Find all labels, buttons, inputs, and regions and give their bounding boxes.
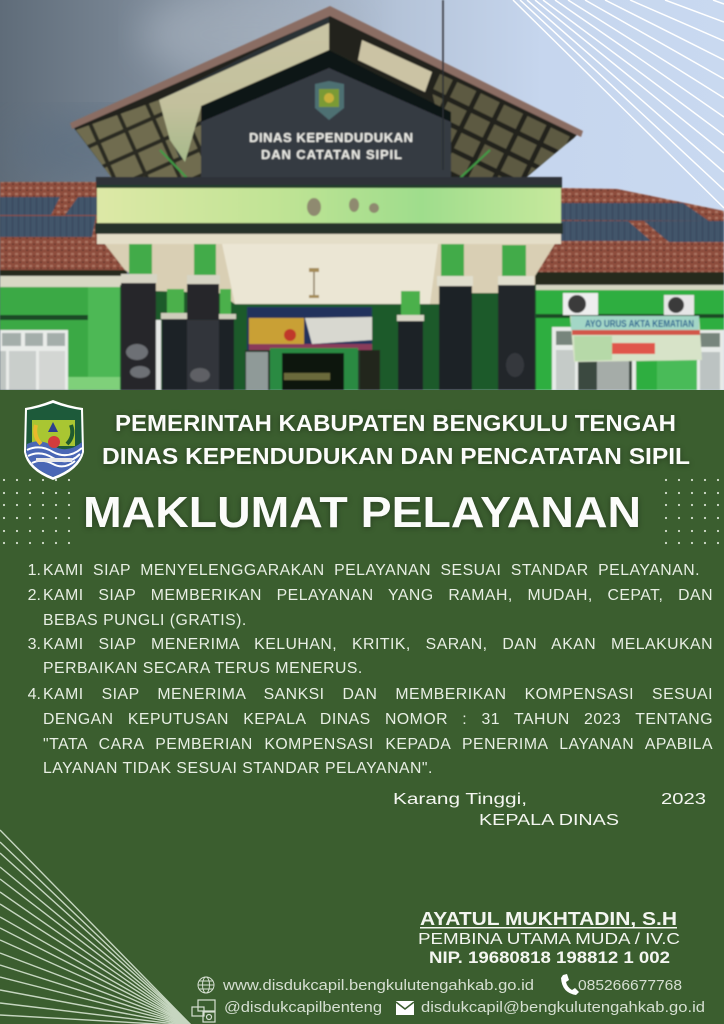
official NIP: NIP. 19680818 198812 1 002 bbox=[429, 949, 670, 967]
left wing wall bbox=[0, 270, 127, 390]
right tiled roof bbox=[528, 188, 724, 272]
title: MAKLUMAT PELAYANAN bbox=[83, 488, 641, 537]
gable sign text: DINAS KEPENDUDUKAN bbox=[249, 130, 413, 145]
text block: service pledge list: 4. bbox=[28, 686, 41, 703]
banner: ayo urus akta kematian: AYO URUS AKTA KEMATIAN bbox=[585, 319, 694, 330]
contact footer bbox=[191, 974, 705, 1023]
text block: service pledge list: LAYANAN TIDAK SESUAI STANDAR PELAYANAN". bbox=[43, 760, 433, 777]
text block: service pledge list: KAMI SIAP MENYELENGGARAKAN PELAYANAN SESUAI STANDAR PELAYANAN. bbox=[43, 562, 700, 579]
text block: service pledge list bbox=[28, 562, 713, 777]
banner: ayo urus akta kematian bbox=[570, 316, 702, 362]
text block: service pledge list: "TATA CARA PEMBERIAN KOMPENSASI KEPADA PENERIMA LAYANAN APABILA bbox=[43, 736, 713, 753]
canopy ceiling and entrance bbox=[97, 234, 561, 390]
left window bbox=[0, 330, 68, 390]
official name: AYATUL MUKHTADIN, S.H bbox=[420, 908, 677, 929]
icon: mail bbox=[396, 1001, 414, 1015]
left solar panels bbox=[0, 197, 97, 237]
dot grid right bbox=[664, 478, 720, 544]
gable sign text bbox=[249, 130, 413, 162]
text block: service pledge list: 1. bbox=[28, 562, 41, 579]
social handle: @disdukcapilbenteng bbox=[224, 1000, 382, 1016]
place and date: 2023 bbox=[661, 791, 706, 808]
dot grid left bbox=[2, 478, 70, 544]
website: www.disdukcapil.bengkulutengahkab.go.id bbox=[222, 978, 534, 994]
heading line: government name: PEMERINTAH KABUPATEN BENGKULU TENGAH bbox=[115, 410, 676, 436]
text block: service pledge list: 2. bbox=[28, 587, 41, 604]
place and date: Karang Tinggi, bbox=[393, 791, 527, 808]
heading line: agency name: DINAS KEPENDUDUKAN DAN PENCATATAN SIPIL bbox=[102, 443, 690, 469]
entrance notice board bbox=[247, 307, 372, 350]
icon: globe bbox=[198, 977, 214, 993]
right wing wall bbox=[528, 272, 724, 390]
air conditioner units bbox=[563, 293, 694, 315]
icon: phone bbox=[561, 974, 579, 995]
heading: institution names and title bbox=[83, 410, 690, 537]
gable emblem bbox=[315, 81, 344, 120]
fascia band bbox=[95, 177, 563, 244]
text block: service pledge list: KAMI SIAP MEMBERIKAN PELAYANAN YANG RAMAH, MUDAH, CEPAT, DAN bbox=[43, 587, 713, 604]
phone number: 085266677768 bbox=[578, 978, 682, 994]
text block: service pledge list: BEBAS PUNGLI (GRATIS). bbox=[43, 612, 247, 629]
position title: KEPALA DINAS bbox=[479, 812, 619, 829]
text block: signature bbox=[393, 791, 706, 967]
text block: service pledge list: KAMI SIAP MENERIMA KELUHAN, KRITIK, SARAN, DAN AKAN MELAKUKAN bbox=[43, 636, 713, 653]
text block: service pledge list: DENGAN KEPUTUSAN KEPALA DINAS NOMOR : 31 TAHUN 2023 TENTANG bbox=[43, 711, 713, 728]
email: disdukcapil@bengkulutengahkab.go.id bbox=[421, 1000, 705, 1016]
left tiled roof bbox=[0, 182, 127, 270]
entrance door bbox=[245, 348, 380, 390]
photo: office building of Dinas Kependudukan bbox=[0, 0, 724, 390]
decorative fan lines top right bbox=[513, 0, 724, 208]
place and date bbox=[393, 791, 706, 808]
roof gable bbox=[70, 0, 583, 181]
text block: service pledge list: PERBAIKAN SECARA TERUS MENERUS. bbox=[43, 660, 363, 677]
gable sign text: DAN CATATAN SIPIL bbox=[261, 147, 402, 162]
text block: service pledge list: 3. bbox=[28, 636, 41, 653]
rear columns bbox=[161, 289, 424, 390]
front columns bbox=[121, 241, 535, 390]
text block: service pledge list: KAMI SIAP MENERIMA SANKSI DAN MEMBERIKAN KOMPENSASI SESUAI bbox=[43, 686, 713, 703]
panel: green information panel bbox=[0, 390, 724, 1024]
official rank: PEMBINA UTAMA MUDA / IV.C bbox=[418, 931, 680, 948]
right solar panels bbox=[554, 203, 724, 242]
icon: regency emblem logo bbox=[24, 400, 84, 480]
icon: social chat bbox=[192, 1000, 215, 1022]
right windows bbox=[471, 327, 724, 390]
